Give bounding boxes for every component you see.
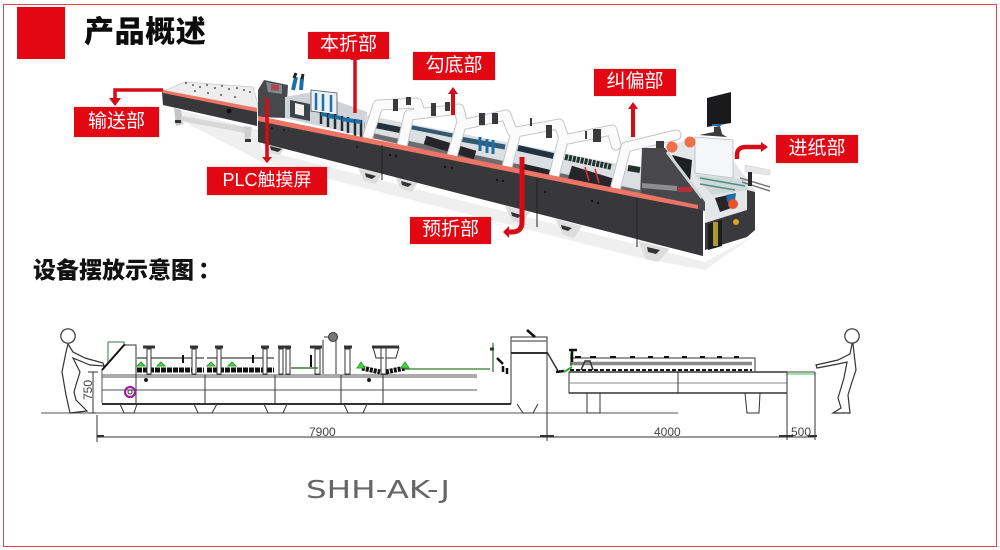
label: PLC touch screen — [207, 167, 327, 195]
person left — [61, 329, 104, 413]
folding section — [285, 92, 367, 137]
500 clearance — [787, 373, 815, 375]
label: pre-fold — [410, 217, 491, 244]
arrow: PLC touch screen — [262, 98, 272, 163]
label: side lay — [594, 69, 676, 96]
dimension text: 7900 — [309, 425, 336, 439]
arrow: pre-fold — [503, 157, 522, 238]
arrow: main fold — [350, 54, 360, 113]
conveyor body — [162, 92, 257, 126]
floor line — [41, 412, 678, 414]
arrow: conveyor — [109, 90, 163, 106]
arrow: crash-lock — [448, 87, 458, 115]
label: main fold: 本折部 — [320, 34, 377, 55]
arrow: feeder — [737, 142, 768, 159]
control column — [258, 80, 288, 118]
model name: SHH-AK-J — [306, 475, 450, 504]
conveyor top — [164, 82, 258, 109]
front panel — [640, 148, 705, 211]
main body — [258, 117, 703, 256]
label: pre-fold: 预折部 — [422, 219, 479, 240]
middle section bed — [365, 115, 660, 210]
dimension text: 4000 — [654, 425, 681, 439]
label: side lay: 纠偏部 — [606, 71, 664, 92]
feeder base — [705, 210, 747, 250]
dimension text: 750 — [81, 380, 95, 400]
feeder section — [665, 138, 755, 250]
section 1 upper units — [137, 332, 507, 374]
label: crash-lock bottom — [413, 52, 495, 80]
heads on arches — [393, 97, 664, 153]
machine feet — [262, 142, 284, 155]
label: conveyor: 输送部 — [88, 111, 145, 132]
label: crash-lock bottom: 勾底部 — [425, 55, 482, 76]
dimension text: 500 — [791, 425, 811, 439]
arrow: side lay — [628, 102, 638, 137]
heading: product overview: 产品概述 — [84, 16, 206, 49]
heading: layout diagram: 设备摆放示意图： — [33, 257, 221, 283]
heading: red square marker — [17, 7, 65, 59]
label: conveyor — [74, 107, 159, 137]
section 2 body — [564, 350, 787, 413]
label: PLC touch screen: PLC触摸屏 — [222, 170, 312, 190]
central frame — [511, 330, 564, 413]
conveyor legs — [174, 108, 183, 126]
section 1 body — [102, 342, 511, 413]
person right — [816, 329, 859, 413]
label: feeder: 进纸部 — [788, 138, 846, 159]
callout arrows — [109, 54, 768, 238]
dimension text — [81, 380, 811, 439]
white arches — [368, 103, 676, 186]
ground shadow — [172, 108, 755, 270]
dimension lines — [88, 372, 817, 442]
label: main fold — [308, 32, 389, 59]
label: feeder — [776, 135, 858, 163]
monitor — [707, 92, 731, 127]
